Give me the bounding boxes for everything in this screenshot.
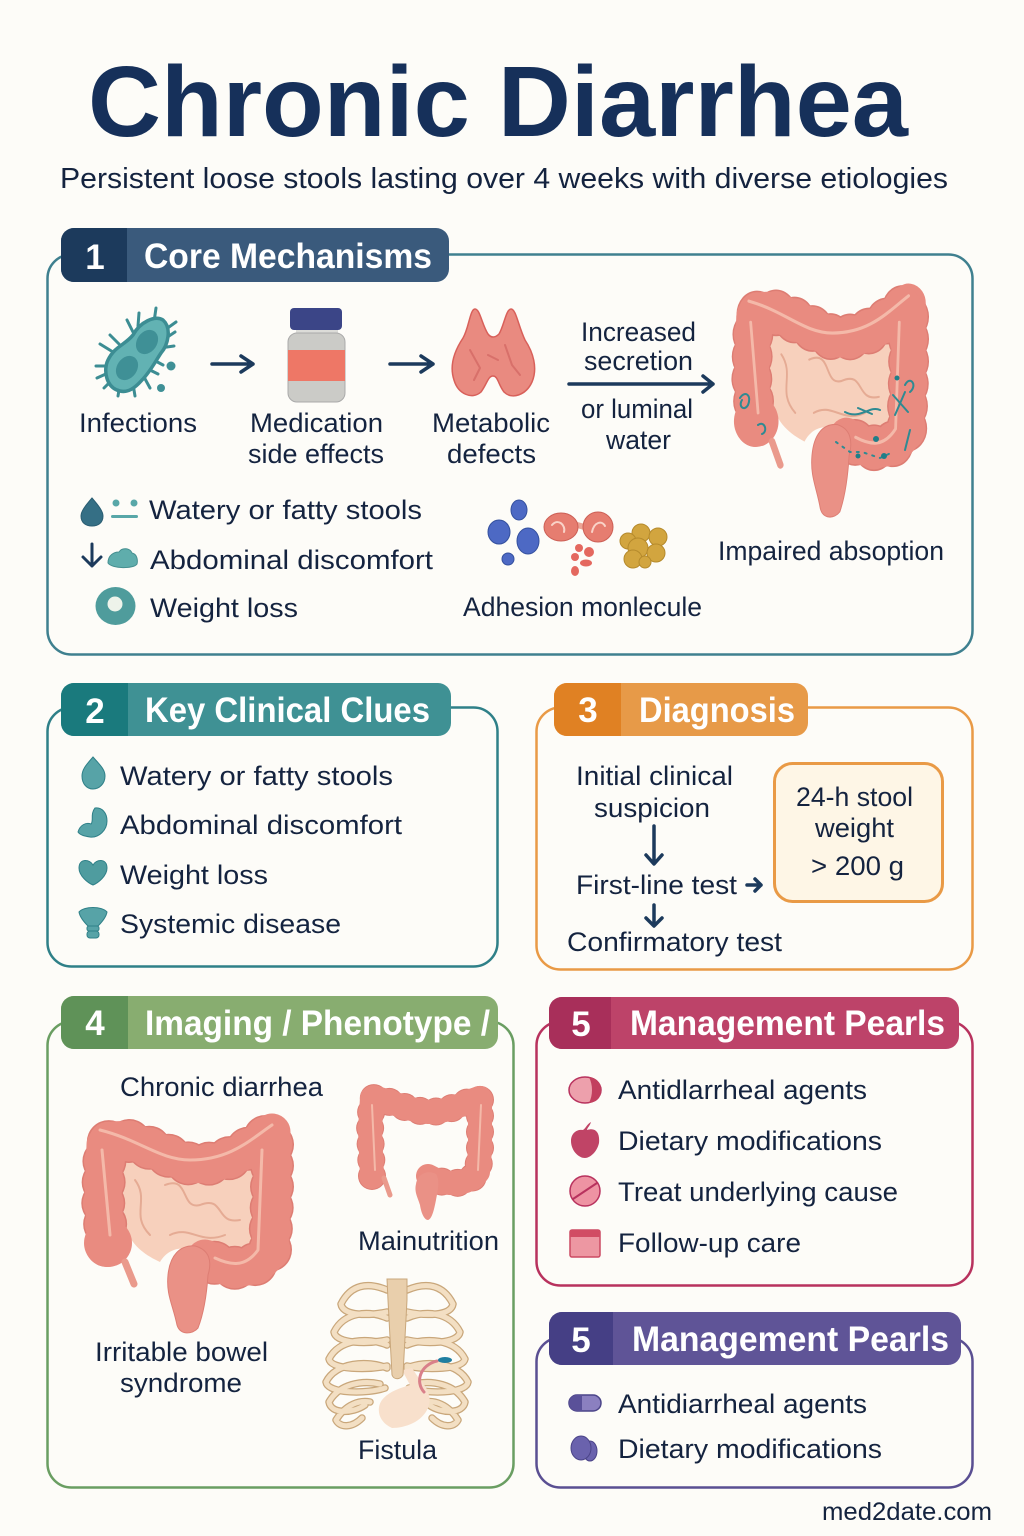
heading: key clinical clues: 2 <box>85 692 105 731</box>
heading: key clinical clues: Key Clinical Clues <box>145 691 430 730</box>
icon: capsule <box>569 1395 601 1411</box>
icon: colon with lesions <box>734 296 913 517</box>
icon: pill <box>569 1077 601 1103</box>
text: abdominal discomfort: Abdominal discomfort <box>120 810 403 840</box>
heading: management pearls: 5 <box>571 1005 591 1044</box>
arrow: first-line to stool weight <box>747 879 761 891</box>
label: irritable bowel syndrome <box>95 1337 268 1398</box>
label: metabolic defects: Metabolic <box>432 408 550 438</box>
text: weight loss: Weight loss <box>150 593 298 623</box>
callout: stool weight: weight <box>814 813 895 843</box>
label: increased secretion: secretion <box>584 346 693 376</box>
icon: small colon <box>370 1098 481 1220</box>
panel: management pearls (crimson) <box>536 997 972 1286</box>
label: metabolic defects: defects <box>447 439 536 469</box>
text: antidiarrheal agents: Antidlarrheal agents <box>618 1075 867 1105</box>
text: dietary modifications: Dietary modifications <box>618 1434 882 1464</box>
icon: treat cause <box>570 1176 600 1206</box>
icon: apple <box>571 1122 599 1158</box>
icon: calendar <box>570 1230 600 1257</box>
panel: imaging / phenotype <box>48 996 514 1488</box>
text: initial clinical suspicion: suspicion <box>594 793 710 823</box>
label: adhesion molecule: Adhesion monlecule <box>463 592 702 622</box>
icon: large colon <box>84 1125 272 1333</box>
text: systemic disease: Systemic disease <box>120 909 341 939</box>
text: watery or fatty stools: Watery or fatty stools <box>149 495 422 525</box>
icon: weight loss ring <box>96 587 136 625</box>
heading: management pearls <box>549 997 959 1049</box>
label: irritable bowel syndrome: Irritable bowel <box>95 1337 268 1367</box>
text: initial clinical suspicion: Initial clinical <box>576 761 733 791</box>
icon: watery stool drop <box>81 498 138 526</box>
heading: imaging / phenotype: Imaging / Phenotype / <box>145 1004 490 1043</box>
label: irritable bowel syndrome: syndrome <box>120 1368 242 1398</box>
text: antidiarrheal agents: Antidiarrheal agents <box>618 1389 867 1419</box>
label: increased secretion <box>581 317 696 376</box>
icon: ribcage with stomach <box>326 1279 468 1428</box>
label: medication side effects: side effects <box>248 439 384 469</box>
label: chronic diarrhea: Chronic diarrhea <box>120 1072 324 1102</box>
label: medication side effects: Medication <box>250 408 383 438</box>
heading: diagnosis <box>554 683 808 736</box>
label: or luminal water <box>581 394 693 455</box>
text: follow-up care: Follow-up care <box>618 1228 801 1258</box>
icon: drop <box>82 757 105 789</box>
heading: management pearls: 5 <box>571 1321 591 1360</box>
icon: medication bottle <box>288 308 345 402</box>
icon: funnel <box>79 908 107 938</box>
text: dietary modifications: Dietary modifications <box>618 1126 882 1156</box>
text: watery or fatty stools: Watery or fatty stools <box>120 761 393 791</box>
callout: stool weight: > 200 g <box>811 851 904 881</box>
text: abdominal discomfort: Abdominal discomfort <box>150 545 434 575</box>
label: metabolic defects <box>432 408 550 469</box>
callout: stool weight <box>774 764 942 902</box>
panel: key clinical clues <box>48 683 498 966</box>
label: fistula: Fistula <box>358 1435 438 1465</box>
text: confirmatory test: Confirmatory test <box>567 927 783 957</box>
arrow: medication to metabolic <box>390 356 433 372</box>
heading: core mechanisms: 1 <box>85 238 105 277</box>
icon: dietary beans <box>571 1436 597 1461</box>
label: malnutrition: Mainutrition <box>358 1226 499 1256</box>
icon: adhesion molecules <box>488 500 667 576</box>
arrow: first-line to confirmatory <box>646 905 662 926</box>
panel: core mechanisms <box>48 228 972 654</box>
icon: bacterium <box>96 308 176 396</box>
heading: core mechanisms <box>61 228 449 282</box>
icon: thyroid <box>452 309 535 396</box>
panel: diagnosis <box>536 683 972 970</box>
label: or luminal water: water <box>605 425 671 455</box>
arrow: suspicion to first-line <box>646 826 662 864</box>
heading: diagnosis: Diagnosis <box>639 691 795 730</box>
icon: abdominal discomfort <box>83 544 137 568</box>
footer: source: med2date.com <box>822 1498 992 1526</box>
text: treat underlying cause: Treat underlying cause <box>618 1177 898 1207</box>
text: initial clinical suspicion <box>576 761 733 823</box>
text: first-line test: First-line test <box>576 870 738 900</box>
icon: stomach <box>78 808 107 837</box>
heading: core mechanisms: Core Mechanisms <box>144 237 432 276</box>
heading: management pearls <box>549 1312 961 1365</box>
heading: key clinical clues <box>61 683 451 736</box>
label: increased secretion: Increased <box>581 317 696 347</box>
label: or luminal water: or luminal <box>581 394 693 424</box>
panel: management pearls (purple) <box>536 1312 972 1488</box>
label: impaired absorption: Impaired absoption <box>718 536 944 566</box>
callout: stool weight: 24-h stool <box>796 782 913 812</box>
label: infections: Infections <box>79 408 197 438</box>
arrow: infections to medication <box>212 356 253 372</box>
label: medication side effects <box>248 408 384 469</box>
heading: imaging / phenotype: 4 <box>85 1004 105 1043</box>
arrow: secretion to colon <box>569 376 713 392</box>
subtitle: Persistent loose stools lasting over 4 weeks with diverse etiologies <box>60 163 948 195</box>
text: weight loss: Weight loss <box>120 860 268 890</box>
title: Chronic Diarrhea <box>88 46 909 158</box>
heading: management pearls: Management Pearls <box>632 1320 949 1359</box>
heading: management pearls: Management Pearls <box>630 1004 945 1043</box>
heading: diagnosis: 3 <box>578 691 598 730</box>
heading: imaging / phenotype <box>61 996 498 1049</box>
icon: heart <box>79 860 107 885</box>
